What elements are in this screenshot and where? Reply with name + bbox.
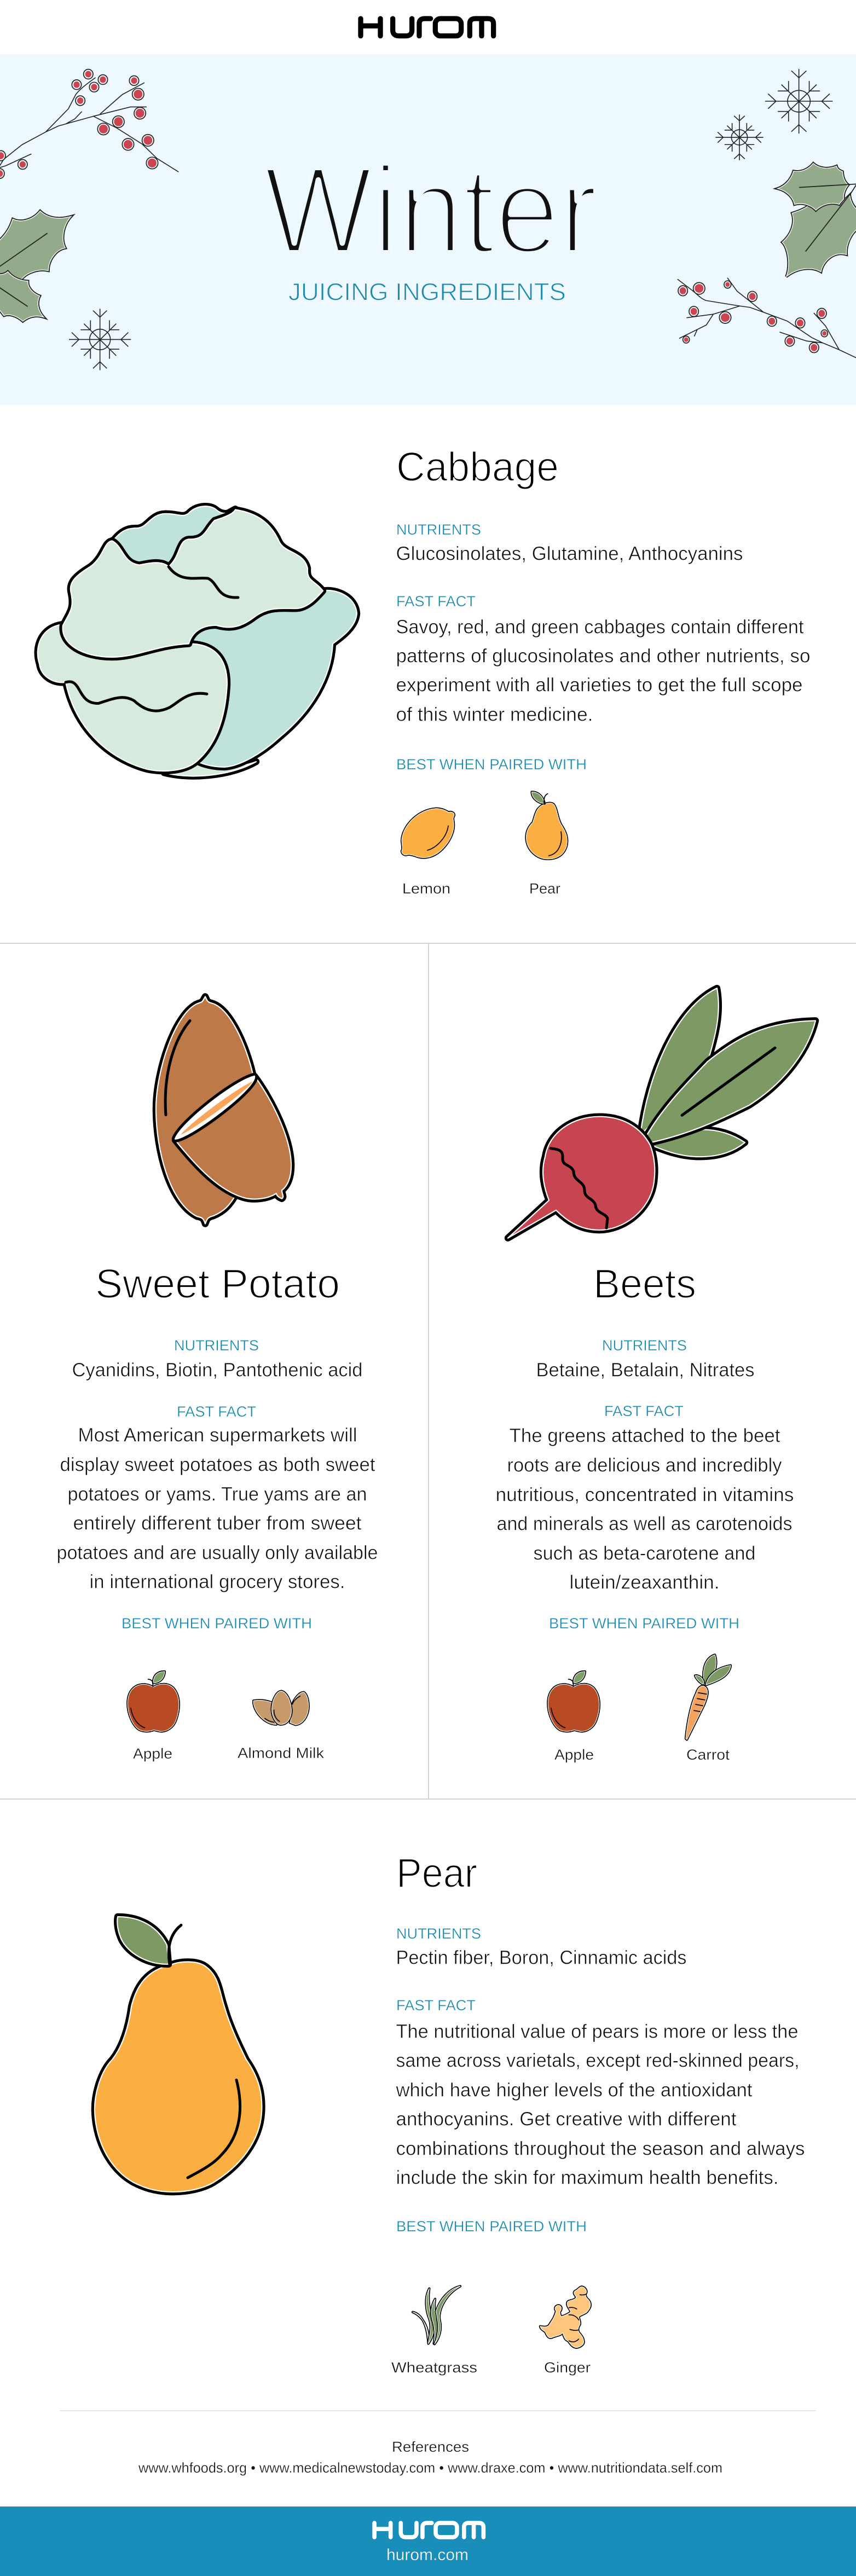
illustration: holly and berry branch, right — [678, 164, 856, 359]
icon: pear — [527, 792, 567, 859]
text: sweet potato fast fact: Most American supermarkets will — [78, 1425, 357, 1446]
panel: footer — [0, 2507, 856, 2576]
illustration: berry branch and holly, left — [0, 69, 178, 321]
divider above references — [60, 2410, 815, 2411]
text: beets fast fact: such as beta-carotene and — [533, 1543, 755, 1564]
label: fast fact: FAST FACT — [396, 593, 476, 610]
panel: winter banner — [0, 54, 856, 405]
text: beets fast fact: The greens attached to the beet — [509, 1425, 780, 1447]
text: pear fast fact: include the skin for maximum health benefits. — [396, 2167, 778, 2189]
icon: apple — [128, 1672, 179, 1731]
label: apple: Apple — [554, 1747, 594, 1763]
text: sweet potato fast fact: entirely different tuber from sweet — [73, 1512, 362, 1534]
illustration: pear — [95, 1917, 262, 2192]
text: beets nutrients: Betaine, Betalain, Nitrates — [536, 1359, 754, 1381]
text: sweet potato fast fact: display sweet potatoes as both sweet — [60, 1454, 375, 1475]
label: ginger: Ginger — [544, 2359, 591, 2376]
logo: hurom white — [374, 2523, 483, 2537]
text: sweet potato fast fact: potatoes and are usually only available — [57, 1542, 378, 1564]
text: pear nutrients: Pectin fiber, Boron, Cinnamic acids — [396, 1947, 686, 1969]
logo: hurom header — [361, 19, 494, 36]
label: carrot: Carrot — [686, 1747, 730, 1763]
label: nutrients: NUTRIENTS — [396, 1925, 481, 1942]
icon: snowflake, left — [69, 309, 131, 370]
text: pear fast fact — [396, 2021, 805, 2189]
text: beets fast fact: roots are delicious and incredibly — [507, 1454, 782, 1476]
icon: wheatgrass — [413, 2286, 460, 2344]
heading: cabbage: Cabbage — [396, 444, 559, 490]
text: beets fast fact: nutritious, concentrated in vitamins — [496, 1484, 794, 1506]
label: best when paired with: BEST WHEN PAIRED WITH — [396, 2218, 587, 2235]
text: pear fast fact: same across varietals, except red-skinned pears, — [396, 2050, 799, 2072]
text: cabbage fast fact: patterns of glucosinolates and other nutrients, so — [396, 646, 810, 666]
label: lemon: Lemon — [402, 880, 450, 897]
text: sweet potato fast fact: in international grocery stores. — [90, 1571, 345, 1592]
text: cabbage nutrients: Glucosinolates, Glutamine, Anthocyanins — [396, 543, 743, 565]
divider lines — [0, 943, 856, 1799]
panel: beets — [496, 988, 815, 1763]
label: pear: Pear — [529, 880, 560, 897]
label: apple: Apple — [133, 1745, 172, 1762]
label: best when paired with: BEST WHEN PAIRED WITH — [549, 1615, 739, 1632]
heading: beets: Beets — [593, 1261, 696, 1307]
text: cabbage fast fact: of this winter medicine. — [396, 704, 593, 726]
icon: almonds — [253, 1691, 309, 1725]
panel: cabbage — [38, 444, 811, 897]
label: fast fact: FAST FACT — [177, 1403, 256, 1420]
text: hurom.com: hurom.com — [386, 2546, 469, 2564]
text: cabbage fast fact: Savoy, red, and green cabbages contain different — [396, 616, 804, 638]
text: sweet potato fast fact: potatoes or yams. True yams are an — [68, 1484, 367, 1505]
heading: sweet potato: Sweet Potato — [95, 1261, 340, 1307]
text: sweet potato nutrients: Cyanidins, Biotin, Pantothenic acid — [72, 1359, 362, 1381]
label: almond milk: Almond Milk — [238, 1745, 325, 1761]
text: beets fast fact: and minerals as well as carotenoids — [497, 1513, 793, 1534]
text: beets fast fact — [496, 1425, 794, 1593]
label: nutrients: NUTRIENTS — [174, 1337, 259, 1354]
text: pear fast fact: anthocyanins. Get creative with different — [396, 2109, 737, 2130]
text: pear fast fact: The nutritional value of pears is more or less the — [396, 2021, 798, 2042]
label: fast fact: FAST FACT — [396, 1997, 476, 2014]
heading: pear: Pear — [396, 1850, 477, 1896]
text: beets fast fact: lutein/zeaxanthin. — [569, 1571, 719, 1593]
text: pear fast fact: combinations throughout the season and always — [396, 2138, 805, 2159]
icon: small snowflake, right — [715, 114, 764, 160]
illustration: cabbage — [38, 506, 357, 776]
label: nutrients: NUTRIENTS — [396, 521, 481, 538]
icon: large snowflake, right — [765, 69, 832, 134]
icon: ginger — [540, 2287, 591, 2348]
title: Winter: Winter — [264, 141, 598, 280]
references heading: References — [392, 2439, 469, 2455]
panel: sweet potato — [57, 996, 378, 1762]
label: fast fact: FAST FACT — [604, 1403, 684, 1419]
text: cabbage fast fact: experiment with all varieties to get the full scope — [396, 674, 802, 696]
subtitle: juicing ingredients: JUICING INGREDIENTS — [288, 279, 566, 305]
illustration: beet — [508, 988, 815, 1238]
icon: carrot — [686, 1655, 731, 1739]
illustration: sweet potato — [156, 996, 291, 1224]
label: nutrients: NUTRIENTS — [602, 1337, 687, 1354]
references links: www.whfoods.org • www.medicalnewstoday.com • www.draxe.com • www.nutritiondata.self.com — [138, 2459, 722, 2476]
icon: lemon — [402, 809, 454, 858]
text: pear fast fact: which have higher levels of the antioxidant — [396, 2079, 753, 2101]
label: best when paired with: BEST WHEN PAIRED WITH — [396, 756, 587, 773]
label: best when paired with: BEST WHEN PAIRED WITH — [122, 1615, 312, 1632]
text: sweet potato fast fact — [57, 1425, 378, 1592]
label: wheatgrass: Wheatgrass — [391, 2359, 477, 2376]
icon: apple — [548, 1672, 599, 1731]
panel: pear — [95, 1850, 805, 2376]
text: cabbage fast fact — [396, 616, 810, 726]
